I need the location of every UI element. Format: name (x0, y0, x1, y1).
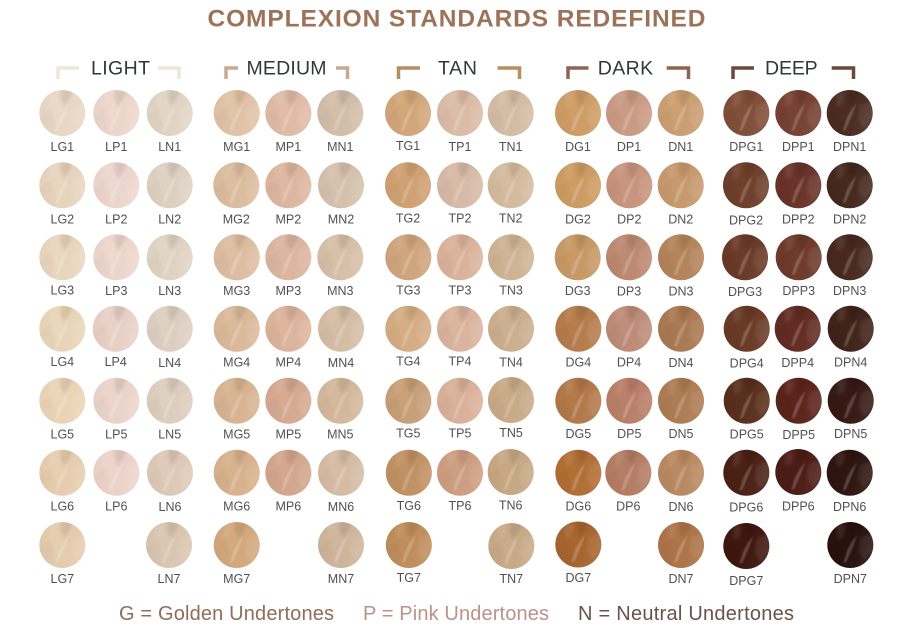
swatch LP4 (92, 305, 140, 369)
swatch LG4: LG4 (50, 355, 74, 369)
swatch DPN3: DPN3 (833, 284, 866, 298)
swatch DN3 (657, 233, 705, 298)
title: COMPLEXION STANDARDS REDEFINED (208, 6, 706, 32)
swatch DPP1 (774, 89, 822, 154)
swatch MG1: MG1 (223, 140, 250, 154)
swatch DG6 (554, 449, 602, 514)
swatch TG7: TG7 (397, 571, 421, 585)
swatch TG2: TG2 (396, 211, 420, 225)
swatch DPP5: DPP5 (782, 428, 815, 442)
swatch DPN7: DPN7 (834, 572, 867, 586)
heading: dark: DARK (598, 58, 653, 80)
swatch TP6 (436, 449, 484, 513)
heading: deep: DEEP (765, 58, 818, 80)
swatch DN6 (657, 449, 705, 514)
swatch DPP3 (775, 233, 823, 298)
swatch DPG6 (722, 449, 770, 515)
swatch DG6: DG6 (565, 500, 591, 514)
swatch DPN2: DPN2 (833, 212, 866, 226)
heading: light (58, 58, 179, 80)
swatch TG6: TG6 (397, 499, 421, 513)
swatch DP2 (605, 161, 653, 226)
swatch MG5 (213, 377, 261, 442)
swatch DPG5: DPG5 (730, 428, 764, 442)
swatch DN6: DN6 (668, 500, 694, 514)
swatch LG7: LG7 (50, 572, 74, 586)
swatch DN5 (657, 377, 705, 441)
swatch MG6: MG6 (223, 500, 250, 514)
swatch MG7: MG7 (223, 572, 250, 586)
swatch TP3: TP3 (449, 283, 472, 297)
swatch MN4 (317, 305, 365, 370)
swatch MN7: MN7 (328, 572, 354, 586)
swatch LG6: LG6 (50, 500, 74, 514)
swatch LG6 (38, 449, 86, 514)
swatch DN7: DN7 (668, 572, 694, 586)
legend (119, 603, 794, 625)
swatch LP2 (92, 161, 140, 226)
panel: medium (212, 58, 365, 586)
swatch MN3 (316, 233, 364, 298)
swatch DPP4 (774, 305, 822, 370)
swatch LP1: LP1 (105, 140, 127, 154)
swatch LN1: LN1 (158, 140, 181, 154)
swatch DG3: DG3 (565, 284, 591, 298)
swatch MG2: MG2 (223, 212, 250, 226)
swatch TN6 (487, 448, 535, 512)
legend: neutral undertones: N = Neutral Undertones (578, 603, 794, 625)
swatch DPG2 (722, 161, 770, 227)
swatch DPN7 (826, 521, 874, 586)
heading: dark (568, 58, 688, 80)
swatch DG2: DG2 (565, 212, 591, 226)
swatch LG3: LG3 (50, 283, 74, 297)
swatch DP6: DP6 (616, 500, 641, 514)
swatch LG2 (38, 161, 86, 226)
swatch DN3: DN3 (668, 284, 694, 298)
swatch DPG7: DPG7 (729, 574, 763, 588)
swatch LG2: LG2 (50, 212, 74, 226)
swatch MN7 (317, 521, 365, 586)
swatch MP1 (264, 89, 312, 154)
swatch MP4 (264, 305, 312, 370)
swatch TG4: TG4 (396, 355, 421, 369)
swatch DP5: DP5 (617, 427, 642, 441)
swatch MN6 (317, 449, 365, 514)
swatch MN2: MN2 (328, 212, 354, 226)
swatch DN5: DN5 (668, 427, 694, 441)
swatch TN5: TN5 (499, 426, 523, 440)
swatch LN2: LN2 (158, 212, 181, 226)
swatch LP3 (92, 233, 140, 298)
swatch TP2: TP2 (449, 211, 472, 225)
swatch LG1: LG1 (50, 140, 74, 154)
swatch DPG2: DPG2 (729, 213, 763, 227)
swatch DPG4: DPG4 (730, 357, 764, 371)
swatch TG7 (385, 521, 433, 585)
panel: light (38, 58, 194, 586)
swatch DG3 (554, 233, 602, 298)
swatch DP1 (605, 89, 653, 154)
swatch LN7 (145, 521, 193, 586)
swatch LN5: LN5 (158, 428, 181, 442)
panel: deep (721, 58, 875, 588)
swatch TP6: TP6 (449, 499, 472, 513)
swatch MP6: MP6 (275, 500, 301, 514)
heading: medium (226, 58, 348, 80)
swatch MP1: MP1 (275, 140, 301, 154)
swatch MG3: MG3 (223, 284, 250, 298)
swatch DN2: DN2 (668, 212, 693, 226)
swatch DPN3 (826, 233, 874, 298)
swatch LN1 (146, 89, 194, 154)
swatch TG5: TG5 (396, 427, 421, 441)
swatch MG7 (213, 521, 261, 586)
swatch MG4 (213, 305, 261, 370)
swatch LP1 (92, 89, 140, 154)
swatch TG2 (384, 161, 432, 225)
swatch DN2 (657, 161, 705, 226)
swatch DPN5 (827, 377, 875, 441)
heading: tan (398, 58, 520, 80)
swatch DPN5: DPN5 (834, 427, 867, 441)
swatch DPG6: DPG6 (729, 501, 763, 515)
swatch DPG3 (721, 233, 769, 299)
swatch MG5: MG5 (223, 428, 250, 442)
swatch DPG4 (723, 305, 771, 371)
swatch MP3: MP3 (275, 284, 301, 298)
swatch DG4 (554, 305, 602, 370)
swatch DG5 (554, 377, 602, 441)
swatch DPN1: DPN1 (833, 140, 866, 154)
swatch DPP2 (774, 161, 822, 226)
swatch DG1 (554, 89, 602, 154)
swatch MG2 (212, 161, 260, 226)
swatch TN6: TN6 (499, 498, 523, 512)
swatch LP5: LP5 (105, 428, 127, 442)
swatch LP2: LP2 (105, 212, 127, 226)
swatch MP2 (264, 161, 312, 226)
swatch DG7 (554, 520, 602, 585)
swatch LP6 (92, 449, 140, 514)
swatch MN5 (316, 377, 364, 442)
swatch MN1: MN1 (327, 140, 354, 154)
swatch LN5 (146, 377, 194, 442)
swatch MP5: MP5 (275, 428, 301, 442)
swatch TP5: TP5 (449, 427, 472, 441)
swatch TG5 (384, 377, 432, 441)
swatch TN7: TN7 (499, 572, 523, 586)
swatch MP4: MP4 (275, 356, 301, 370)
swatch LP4: LP4 (105, 355, 127, 369)
panel: tan (384, 58, 535, 586)
swatch LG5: LG5 (50, 428, 74, 442)
swatch LN3 (146, 233, 194, 298)
swatch TN4: TN4 (499, 356, 523, 370)
swatch LG7 (38, 521, 86, 586)
swatch DP4 (605, 305, 653, 370)
panel: dark (554, 58, 705, 586)
swatch MG1 (213, 89, 261, 154)
swatch DP6 (604, 449, 652, 514)
swatch LN7: LN7 (158, 572, 181, 586)
swatch TP1: TP1 (449, 140, 472, 154)
swatch TP3 (436, 233, 484, 297)
swatch DPG7 (722, 522, 770, 588)
swatch LN3: LN3 (158, 284, 181, 298)
swatch MP2: MP2 (275, 212, 301, 226)
swatch DPP2: DPP2 (782, 212, 815, 226)
swatch DPN4 (827, 305, 875, 370)
swatch DN4 (657, 305, 705, 370)
swatch TN4 (487, 305, 535, 370)
swatch MN1 (316, 89, 364, 154)
swatch LN6 (146, 449, 194, 514)
swatch DPP1: DPP1 (782, 140, 815, 154)
swatch TP5 (436, 377, 484, 441)
swatch DPP4: DPP4 (781, 356, 814, 370)
swatch TG1: TG1 (396, 139, 420, 153)
swatch DPG3: DPG3 (728, 285, 762, 299)
swatch MN2 (317, 161, 365, 226)
swatch DP4: DP4 (617, 356, 641, 370)
swatch DPG1: DPG1 (729, 140, 763, 154)
swatch TN3: TN3 (499, 283, 523, 297)
swatch DP2: DP2 (617, 212, 642, 226)
swatch DPN6: DPN6 (833, 500, 866, 514)
swatch TP4 (436, 305, 484, 369)
swatch MG3 (213, 233, 261, 298)
swatch TG4 (384, 305, 432, 369)
swatch DN1 (657, 89, 705, 154)
swatch MN4: MN4 (328, 356, 354, 370)
swatch DP3: DP3 (617, 284, 641, 298)
swatch TP2 (436, 161, 484, 225)
swatch MP3 (264, 233, 312, 298)
swatch DG2 (554, 161, 602, 226)
swatch DN1: DN1 (668, 140, 693, 154)
swatch LN2 (146, 161, 194, 226)
swatch DPG5 (723, 377, 771, 442)
swatch MN5: MN5 (327, 428, 354, 442)
swatch DP5 (605, 377, 653, 441)
swatch DPP3: DPP3 (782, 284, 815, 298)
swatch TP4: TP4 (449, 355, 472, 369)
swatch DPN2 (826, 161, 874, 226)
swatch MG4: MG4 (223, 356, 250, 370)
swatch LN6: LN6 (159, 500, 182, 514)
swatch TG3: TG3 (396, 283, 421, 297)
swatch TG6 (385, 449, 433, 513)
swatch TN3 (487, 233, 535, 297)
heading: medium: MEDIUM (246, 58, 326, 80)
swatch MP5 (264, 377, 312, 442)
swatch TN1 (487, 89, 535, 154)
swatch DPP6 (774, 448, 822, 514)
swatch DPN6 (826, 449, 874, 514)
swatch TP1 (436, 89, 484, 154)
swatch LG5 (38, 377, 86, 442)
heading: deep (733, 58, 854, 80)
swatch TN2: TN2 (499, 211, 523, 225)
swatch DG4: DG4 (565, 356, 591, 370)
swatch DPG1 (722, 89, 770, 154)
swatch TG1 (384, 89, 432, 153)
swatch TN7 (487, 522, 535, 586)
swatch LP3: LP3 (105, 284, 127, 298)
swatch DN4: DN4 (668, 356, 694, 370)
swatch MN6: MN6 (328, 500, 354, 514)
swatch DN7 (657, 521, 705, 586)
legend: pink undertones: P = Pink Undertones (363, 603, 549, 625)
swatch LG4 (38, 305, 86, 369)
swatch DPN4: DPN4 (834, 356, 867, 370)
swatch DPN1 (826, 89, 874, 154)
swatch LP6: LP6 (105, 500, 127, 514)
swatch TN1: TN1 (499, 140, 523, 154)
swatch LN4 (146, 305, 194, 370)
swatch DG7: DG7 (565, 571, 591, 585)
heading: tan: TAN (438, 58, 477, 80)
swatch LG3 (38, 233, 86, 297)
swatch MG6 (213, 449, 261, 514)
swatch DP3 (605, 233, 653, 298)
swatch MP6 (264, 449, 312, 514)
heading: light: LIGHT (91, 58, 150, 80)
swatch LP5 (92, 377, 140, 442)
swatch DPP5 (775, 377, 823, 442)
swatch DG5: DG5 (565, 427, 591, 441)
swatch TN2 (487, 161, 535, 225)
swatch TN5 (487, 376, 535, 440)
swatch DG1: DG1 (565, 140, 591, 154)
swatch LG1 (38, 89, 86, 154)
swatch LN4: LN4 (158, 356, 181, 370)
swatch MN3: MN3 (327, 284, 354, 298)
swatch TG3 (384, 233, 432, 297)
swatch DPP6: DPP6 (782, 500, 815, 514)
swatch DP1: DP1 (617, 140, 641, 154)
legend: golden undertones: G = Golden Undertones (119, 603, 334, 625)
